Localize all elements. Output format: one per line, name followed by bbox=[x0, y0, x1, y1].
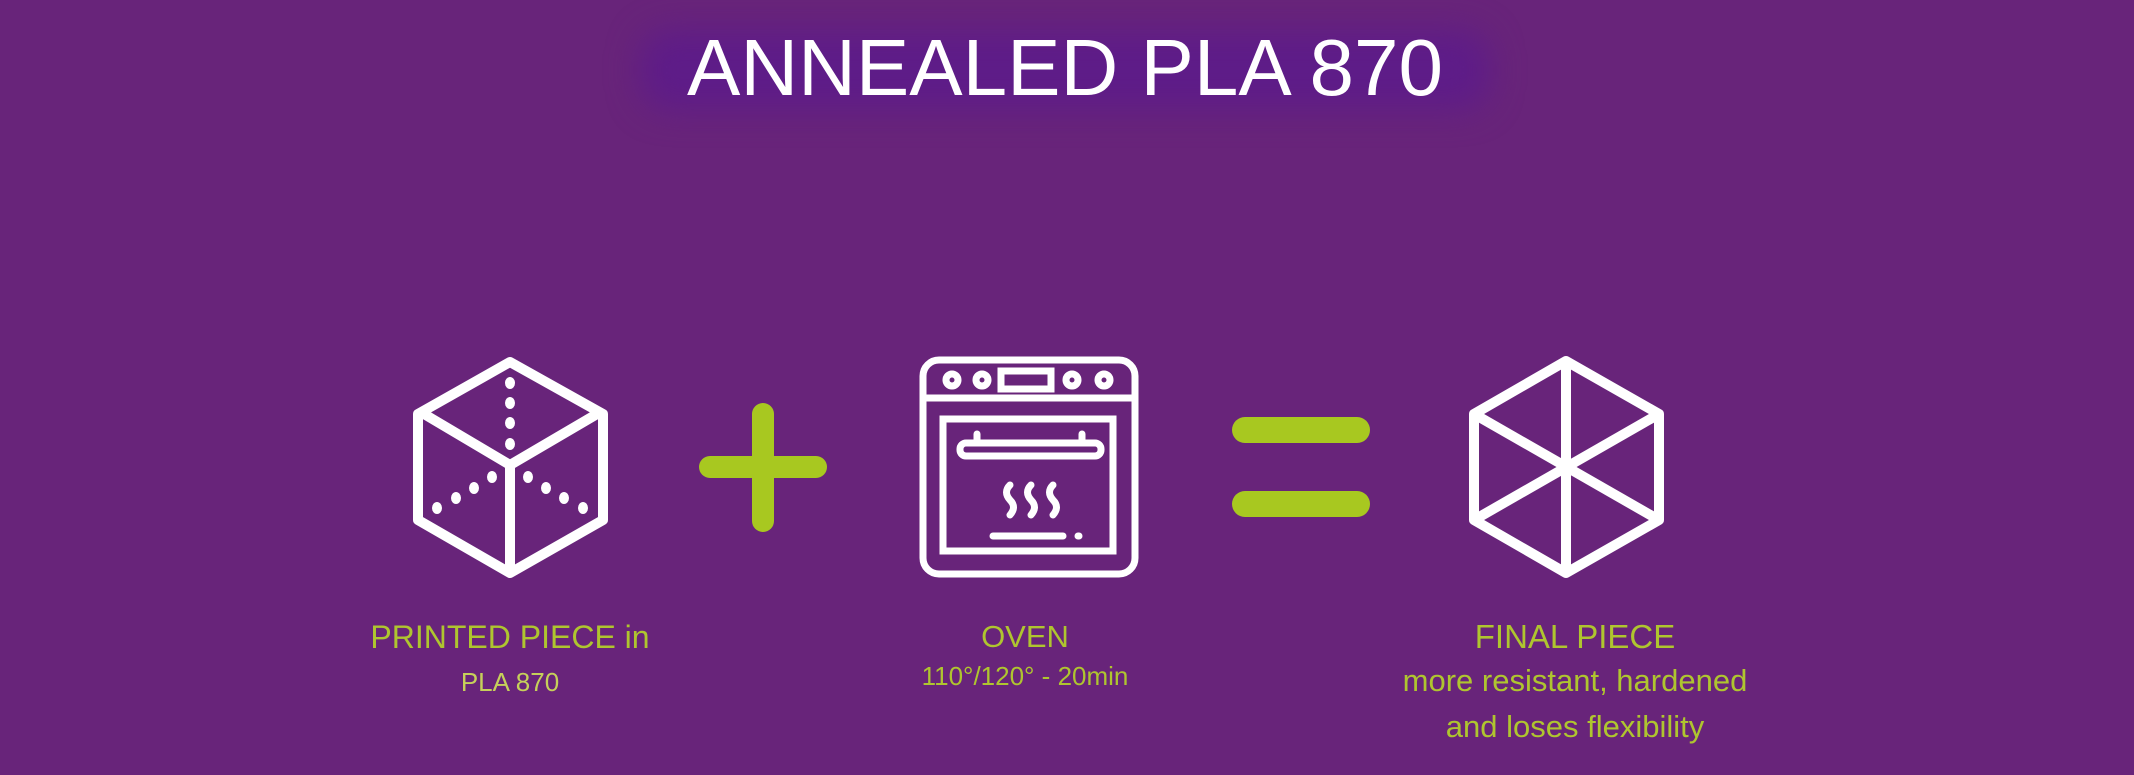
label: printed piece bbox=[370, 619, 650, 697]
icon: final hexagon bbox=[1474, 361, 1659, 573]
label: printed piece: PRINTED PIECE in bbox=[370, 619, 650, 655]
icon: oven bbox=[923, 360, 1135, 574]
icon: plus bbox=[710, 414, 816, 521]
label: final piece bbox=[1403, 618, 1747, 744]
label: printed piece: PLA 870 bbox=[461, 667, 559, 697]
title: ANNEALED PLA 870 bbox=[687, 23, 1443, 112]
label: final piece: FINAL PIECE bbox=[1475, 618, 1675, 655]
icon: equals bbox=[1245, 430, 1357, 504]
label: oven: OVEN bbox=[981, 619, 1069, 654]
icon: printed cube bbox=[418, 362, 603, 573]
label: oven bbox=[922, 619, 1128, 691]
label: final piece: more resistant, hardened bbox=[1403, 663, 1747, 698]
label: oven: 110°/120° - 20min bbox=[922, 661, 1128, 691]
label: final piece: and loses flexibility bbox=[1446, 709, 1704, 744]
